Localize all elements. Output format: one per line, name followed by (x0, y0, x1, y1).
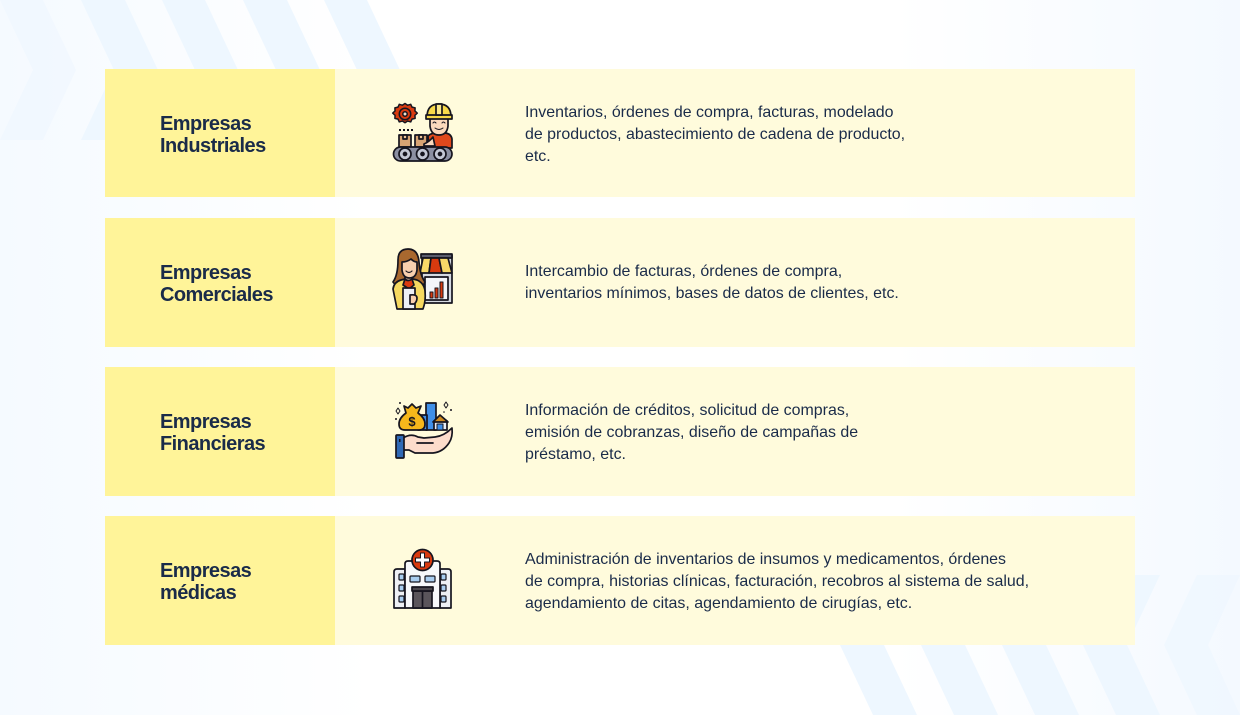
description: Empresas Financieras: emisión de cobranzas, diseño de campañas de (525, 424, 858, 441)
description: Empresas médicas: Administración de inventarios de insumos y medicamentos, órdenes (525, 551, 1006, 568)
description: Empresas Industriales (525, 104, 905, 165)
description: Empresas Financieras (525, 402, 858, 463)
description: Empresas Comerciales (525, 263, 899, 302)
heading: Empresas Industriales: Empresas (160, 113, 251, 135)
icon: shop owner woman (392, 248, 453, 310)
description: Empresas Industriales: de productos, abastecimiento de cadena de producto, (525, 126, 905, 143)
heading: Empresas Financieras (160, 411, 265, 455)
panel: Empresas Comerciales (105, 218, 1135, 347)
description: Empresas Financieras: Información de créditos, solicitud de compras, (525, 402, 849, 419)
description: Empresas médicas (525, 551, 1029, 612)
heading: Empresas médicas: Empresas (160, 560, 251, 582)
heading: Empresas Comerciales: Comerciales (160, 284, 273, 306)
description: Empresas médicas: de compra, historias clínicas, facturación, recobros al sistema de salud, (525, 573, 1029, 590)
icon: factory worker on conveyor (392, 102, 453, 162)
heading: Empresas Comerciales (160, 262, 273, 306)
heading: Empresas Comerciales: Empresas (160, 262, 251, 284)
heading: Empresas Industriales (160, 113, 266, 157)
description: Empresas médicas: agendamiento de citas, agendamiento de cirugías, etc. (525, 595, 912, 612)
panel: Empresas Financieras (105, 367, 1135, 496)
description: Empresas Financieras: préstamo, etc. (525, 446, 626, 463)
description: Empresas Comerciales: Intercambio de facturas, órdenes de compra, (525, 263, 842, 280)
heading: Empresas Financieras: Financieras (160, 433, 265, 455)
heading: Empresas médicas (160, 560, 251, 604)
heading: Empresas médicas: médicas (160, 582, 236, 604)
panel: Empresas médicas (105, 516, 1135, 645)
panel: Empresas Industriales (105, 69, 1135, 197)
description: Empresas Industriales: Inventarios, órdenes de compra, facturas, modelado (525, 104, 894, 121)
icon: hand holding money and buildings (395, 402, 454, 459)
description: Empresas Industriales: etc. (525, 148, 551, 165)
heading: Empresas Industriales: Industriales (160, 135, 266, 157)
heading: Empresas Financieras: Empresas (160, 411, 251, 433)
description: Empresas Comerciales: inventarios mínimos, bases de datos de clientes, etc. (525, 285, 899, 302)
icon: hand holding money and buildings: $ (408, 414, 416, 429)
icon: hospital building (393, 548, 452, 609)
